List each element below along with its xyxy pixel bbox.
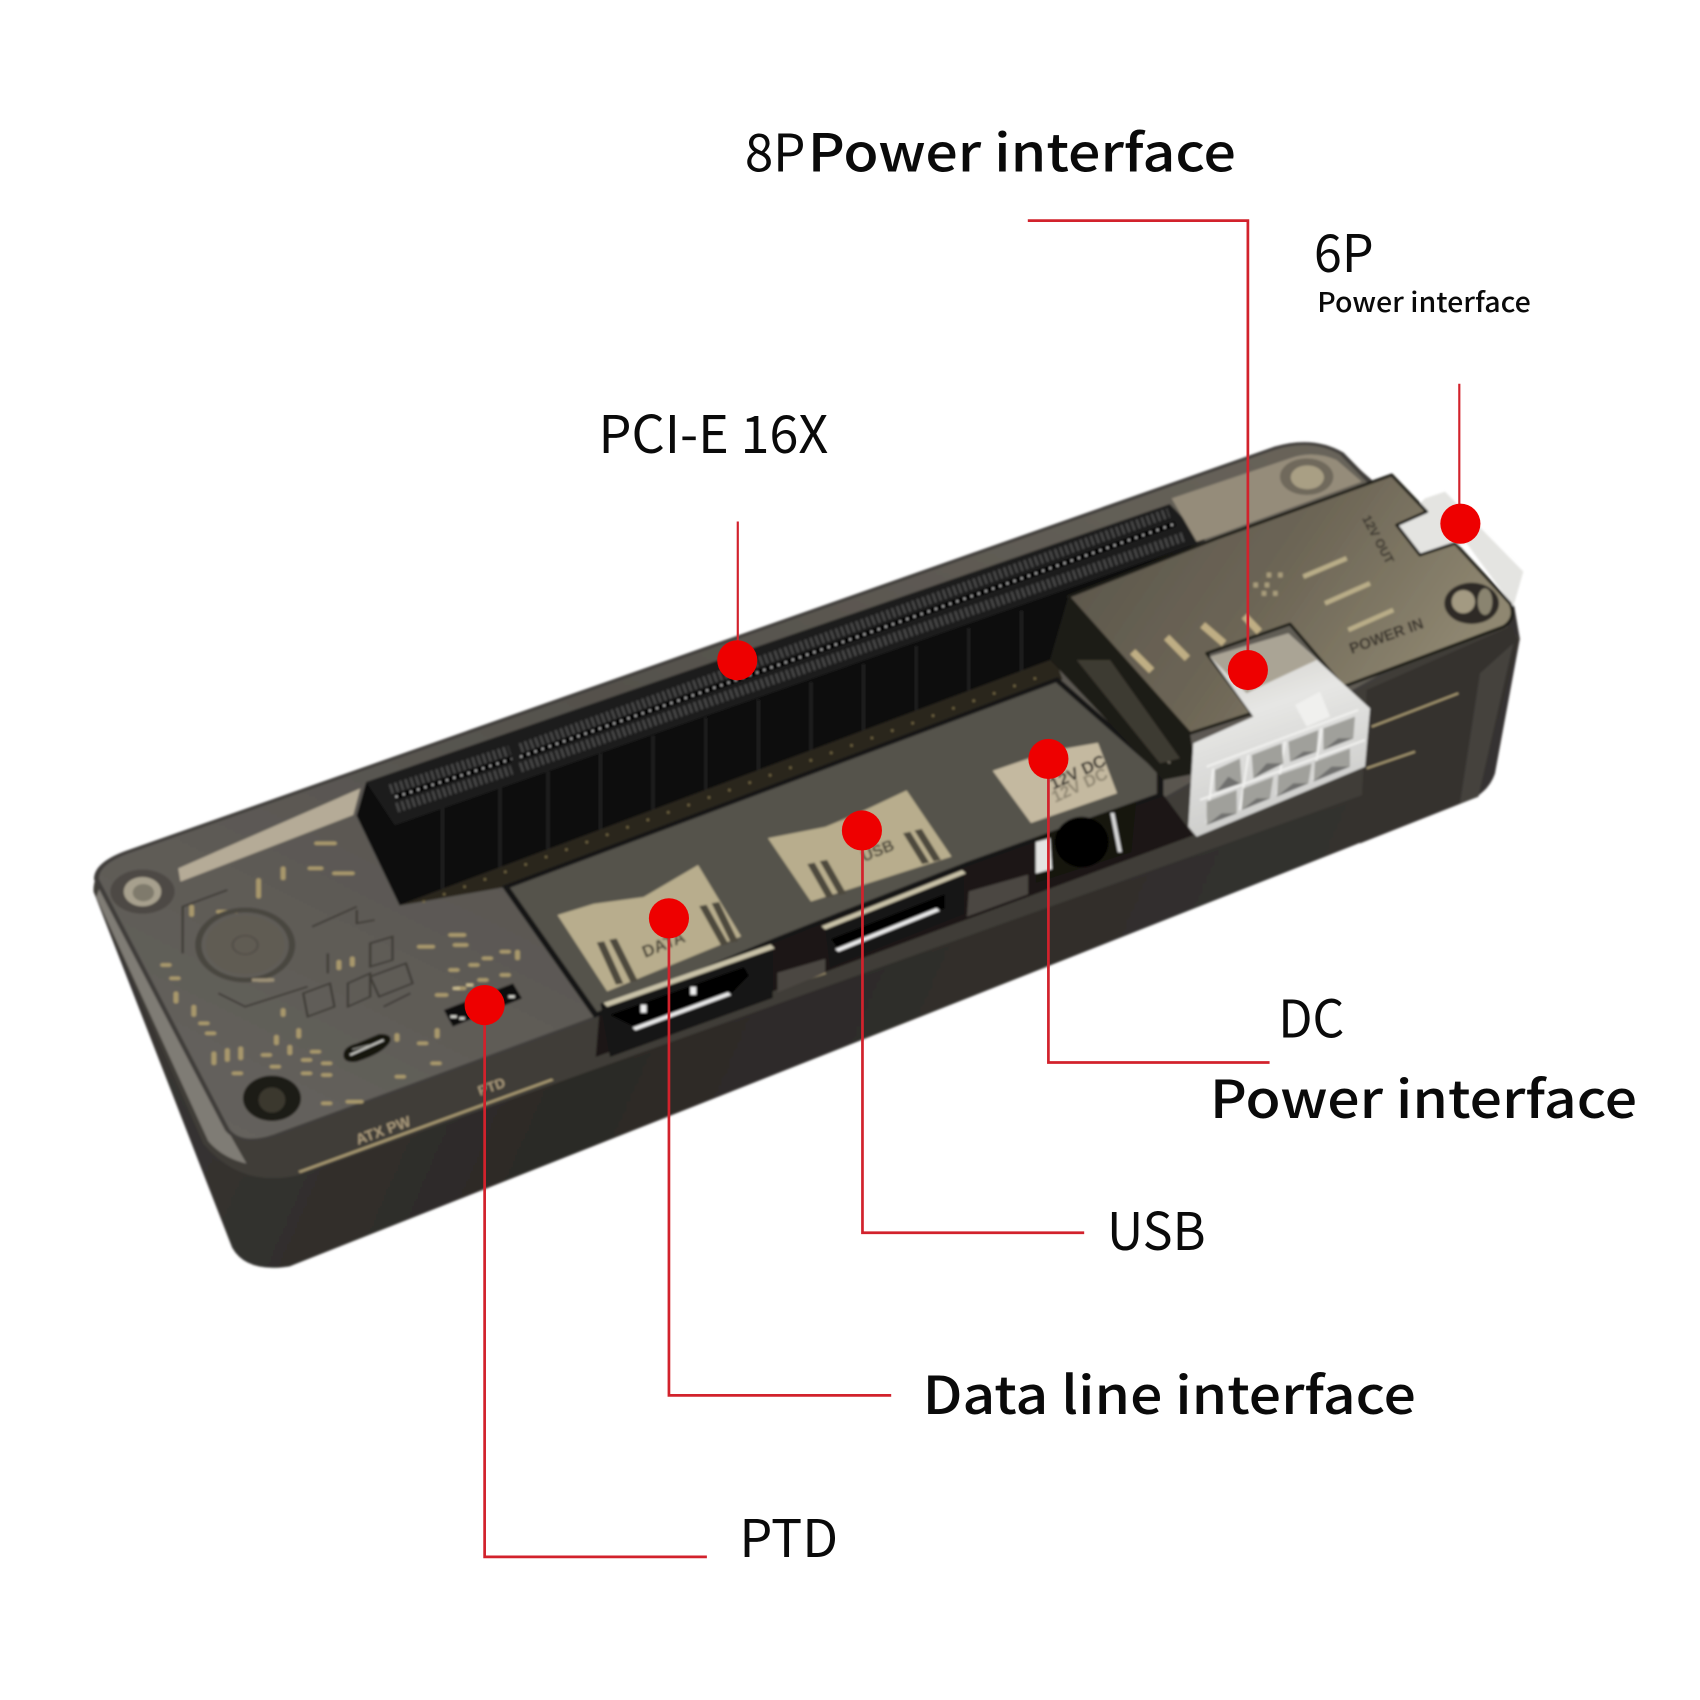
- ATX connector: [343, 1034, 391, 1062]
- label: DC: DC: [1278, 978, 1344, 1053]
- printed label: PTD: PTD: [476, 1074, 507, 1099]
- leader: DC power: [1048, 758, 1270, 1062]
- enclosure body and lid base: [93, 444, 1520, 1268]
- label: USB: USB: [1107, 1190, 1206, 1265]
- marker: PTD: [465, 985, 505, 1025]
- leader: 6P power: [1458, 384, 1460, 524]
- printed label: 12V DC: 12V DC: [1047, 751, 1109, 794]
- printed label: ATX PW: ATX PW: [354, 1113, 414, 1149]
- 8P white connector: [1188, 633, 1370, 837]
- 6P white connector: [1397, 492, 1523, 607]
- label: PTD: PTD: [739, 1497, 838, 1572]
- DC jack: [1036, 802, 1136, 883]
- USB port plate: [768, 790, 952, 902]
- printed label: POWER IN: POWER IN: [1347, 615, 1426, 658]
- label: DC Power interface: Power interface: [1210, 1058, 1637, 1133]
- marker: DC: [1028, 739, 1068, 779]
- PCB components: [163, 843, 518, 1103]
- label: 6P: 6P: [1314, 212, 1374, 287]
- callouts: [465, 111, 1637, 1572]
- marker: USB: [842, 810, 882, 851]
- front port panel: [506, 680, 1194, 1057]
- slot contact rows: [390, 513, 1184, 902]
- leader: PTD: [485, 1005, 707, 1557]
- leader: USB: [862, 830, 1084, 1233]
- marker: data: [649, 898, 689, 938]
- label: 6P sub text: Power interface: [1317, 281, 1531, 320]
- printed label: DATA: DATA: [639, 927, 688, 962]
- tan strip right: [1172, 455, 1362, 542]
- PCI-E 16X slot: [357, 504, 1205, 905]
- PTD switch: [444, 983, 522, 1027]
- cover: [1068, 475, 1512, 733]
- tan strip left: [110, 788, 522, 1121]
- DC port plate: [993, 743, 1117, 823]
- label: Data line interface: Data line interface: [923, 1354, 1416, 1429]
- DATA port plate: [557, 865, 741, 991]
- label: 8P Power interface: Power interface: [808, 111, 1236, 186]
- slot housing: [357, 504, 1205, 905]
- printed label: 12V OUT: 12V OUT: [1359, 513, 1396, 567]
- icon: right screw post: [1444, 583, 1499, 624]
- leader: 8P power: [1028, 221, 1248, 669]
- marker: PCI-E: [717, 640, 757, 680]
- leader: PCI-E 16X: [737, 521, 739, 660]
- label: PCI-E 16X: PCI-E 16X: [598, 393, 828, 468]
- marker: 8P: [1228, 650, 1268, 690]
- HDMI data port: [600, 945, 773, 1057]
- printed label: 12V DC ghost: 12V DC: [1049, 764, 1111, 807]
- printed label: USB: USB: [859, 837, 897, 866]
- PSU cover, connectors: [1050, 455, 1523, 843]
- marker: 6P: [1440, 504, 1480, 544]
- icon: top-left screw post: [110, 870, 175, 914]
- power pins under cover: [1133, 558, 1393, 671]
- device: PCI-E dock enclosure: [93, 444, 1523, 1268]
- label: 8P Power interface: 8P: [745, 111, 806, 186]
- icon: top-right screw post: [1280, 458, 1333, 495]
- HDMI USB port: [823, 872, 964, 967]
- icon: bottom screw post: [243, 1076, 301, 1121]
- side gold seam lines: [1367, 693, 1458, 768]
- leader: data line: [669, 918, 891, 1395]
- dark channel between cover and port panel: [1050, 597, 1197, 780]
- lower right side: [1360, 627, 1518, 843]
